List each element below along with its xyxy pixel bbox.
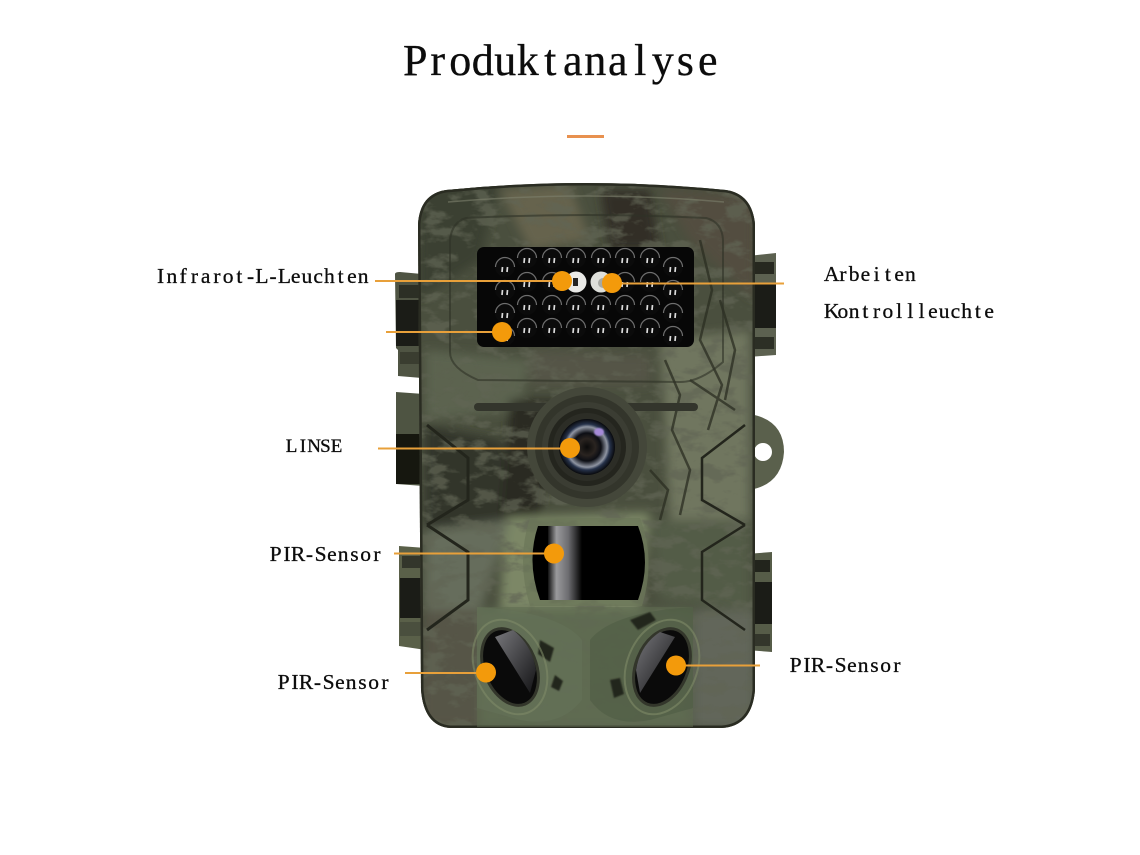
bright indicator LEDs [566, 272, 612, 292]
trail camera [395, 175, 784, 735]
mounting ear [750, 414, 784, 490]
title accent dash [567, 135, 604, 138]
callout: PIR-Sensor right [666, 653, 900, 677]
infrared LED panel [477, 247, 694, 347]
camouflage bark texture [410, 175, 760, 735]
left side clips [395, 272, 426, 650]
raised LED surround [450, 215, 723, 382]
lower sensor block [459, 607, 713, 727]
title: Produktanalyse [403, 36, 718, 85]
callout: LINSE: LINSE [286, 436, 342, 457]
right side clips [746, 253, 776, 652]
callout: PIR-Sensor center [270, 542, 564, 566]
side grip right [702, 425, 745, 630]
lens slot [474, 403, 698, 411]
right PIR lens [611, 608, 713, 726]
callout: Arbeiten Kontrollleuchte [602, 262, 994, 323]
callout: Arbeiten Kontrollleuchte: Kontrollleuchte [824, 299, 994, 323]
housing rim [418, 183, 755, 728]
camera body [410, 175, 760, 735]
callout: PIR-Sensor right: PIR-Sensor [790, 653, 900, 677]
bark veins [650, 240, 735, 520]
callout: PIR-Sensor left [278, 662, 496, 694]
callout: Infrarot-L-Leuchten [157, 264, 572, 342]
camera lens [527, 387, 647, 507]
callout: Arbeiten Kontrollleuchte: Arbeiten [824, 262, 916, 286]
main PIR window [523, 518, 649, 606]
callout: PIR-Sensor center: PIR-Sensor [270, 542, 380, 566]
callout: Infrarot-L-Leuchten: Infrarot-L-Leuchten [157, 264, 369, 288]
callout: LINSE [286, 436, 580, 458]
callout: PIR-Sensor left: PIR-Sensor [278, 670, 388, 694]
left PIR lens [459, 608, 561, 726]
side grip left [427, 425, 468, 630]
